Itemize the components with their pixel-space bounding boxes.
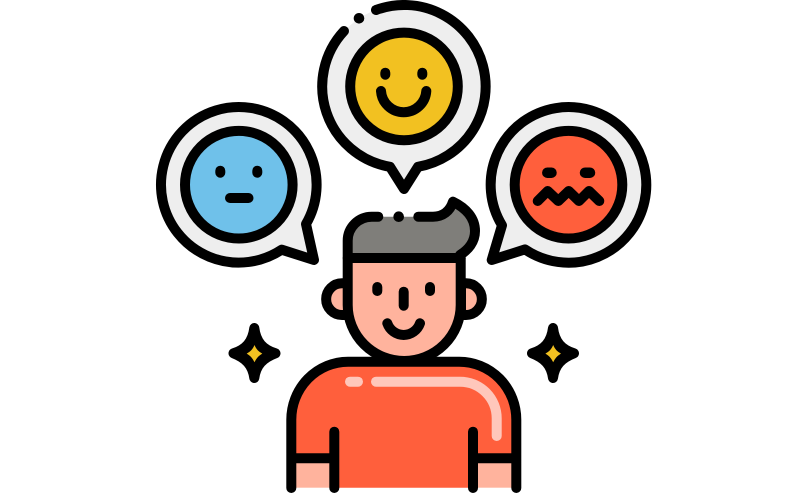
eyes — [377, 287, 430, 291]
speech bubble: happy face — [322, 5, 486, 189]
nose — [399, 292, 409, 306]
face — [348, 258, 461, 361]
icon: yellow smiling face — [350, 33, 458, 140]
person: torso in red t-shirt — [291, 362, 516, 488]
left ear — [326, 283, 348, 315]
shirt outline — [291, 362, 516, 488]
person: head — [326, 202, 482, 361]
hair — [348, 202, 475, 258]
mouth — [387, 323, 420, 335]
icon: left sparkle — [234, 328, 276, 378]
shirt highlights — [350, 382, 497, 436]
speech bubble: upset face — [491, 107, 646, 263]
left arm — [291, 458, 334, 488]
right arm — [473, 458, 516, 488]
right ear — [461, 283, 482, 315]
icon: blue neutral face — [185, 131, 293, 238]
icon: right sparkle — [532, 328, 574, 378]
speech bubble: neutral face — [161, 107, 317, 263]
icon: red upset face — [515, 131, 622, 238]
